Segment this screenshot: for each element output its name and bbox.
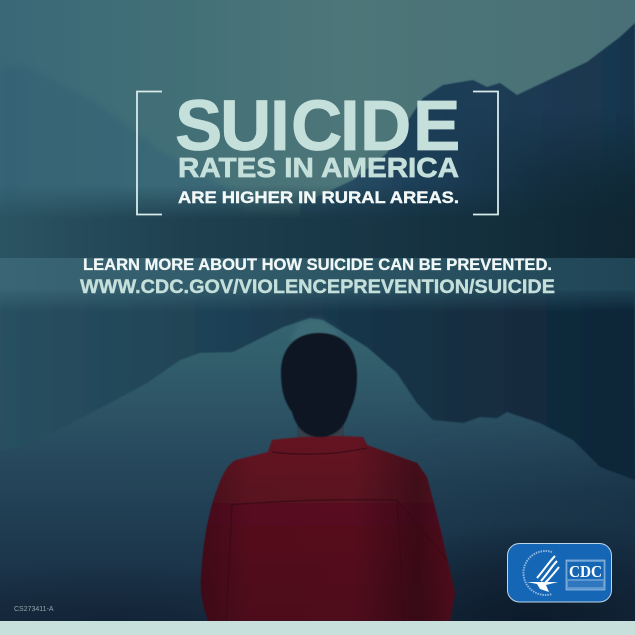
website url: WWW.CDC.GOV/VIOLENCEPREVENTION/SUICIDE	[80, 276, 555, 298]
publication code: CS273411-A	[14, 606, 54, 613]
head	[281, 333, 357, 437]
background: misty sky and mountains	[0, 0, 635, 262]
jacket yoke seam	[226, 448, 447, 621]
subtitle: rates in america: RATES IN AMERICA	[178, 152, 459, 183]
CDC mark: CDC	[569, 562, 602, 581]
bottom band	[0, 621, 635, 635]
right bracket	[473, 92, 498, 214]
background: lake with reflection	[0, 258, 635, 621]
person: man seen from behind	[201, 333, 455, 621]
call to action: LEARN MORE ABOUT HOW SUICIDE CAN BE PREVENTED.	[83, 256, 552, 274]
left bracket	[137, 92, 162, 214]
logo: HHS and CDC badge	[508, 544, 612, 602]
icon: HHS eagle	[523, 551, 559, 595]
subtitle: rural areas: ARE HIGHER IN RURAL AREAS.	[178, 188, 459, 207]
jacket shading	[201, 436, 455, 621]
title: SUICIDE: SUICIDE	[175, 87, 460, 166]
jacket	[201, 436, 455, 621]
neck	[297, 424, 344, 440]
